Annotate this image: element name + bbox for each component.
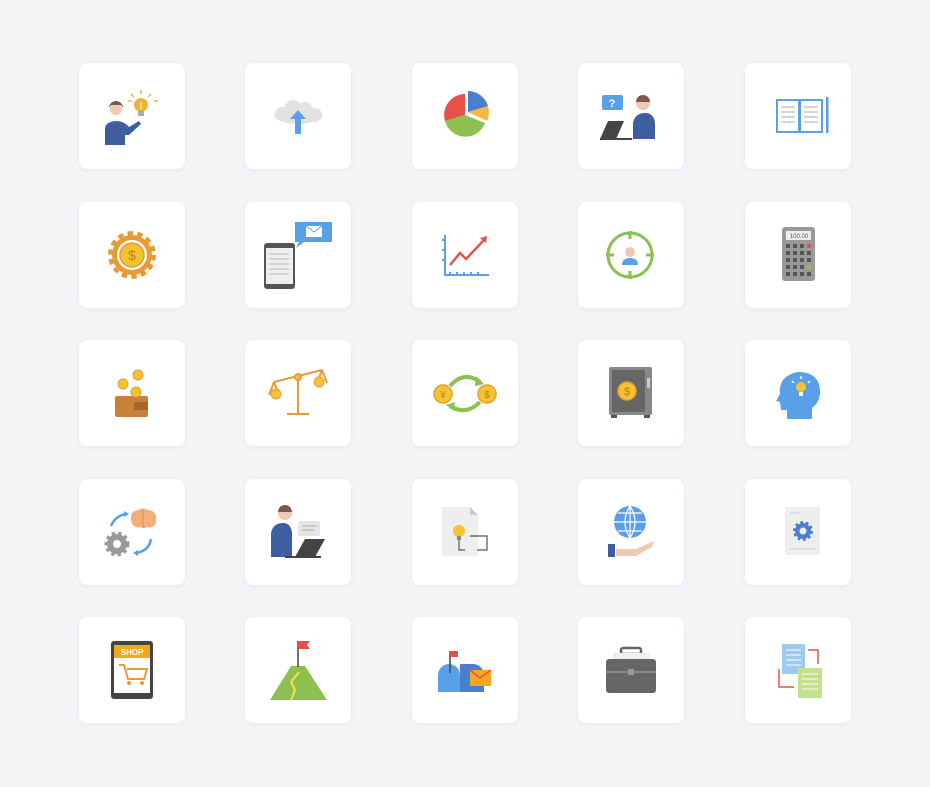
icon: person in circle target (606, 231, 654, 279)
card: laptop question (578, 63, 684, 169)
icon: briefcase with papers (606, 648, 656, 693)
icon: document with gear (785, 507, 820, 555)
card: briefcase (578, 617, 684, 723)
icon: globe on hand (608, 506, 654, 557)
card: balance scale (245, 340, 351, 446)
card: mountain flag (245, 617, 351, 723)
icon: tablet shop: SHOP (121, 648, 144, 657)
card: money gear (79, 202, 185, 308)
card: shop tablet (79, 617, 185, 723)
card: calculator (745, 202, 851, 308)
card: person laptop chat (245, 479, 351, 585)
icon: yen dollar exchange (434, 376, 496, 411)
card: pie chart (412, 63, 518, 169)
icon: document transfer (779, 644, 822, 698)
icon: balance scale (269, 370, 327, 414)
card: gear brain (79, 479, 185, 585)
card: idea person (79, 63, 185, 169)
card: head idea (745, 340, 851, 446)
icon: person at laptop with question: ? (609, 98, 616, 110)
card: idea document (412, 479, 518, 585)
icon: calculator: 100.00 (790, 234, 809, 240)
card: safe (578, 340, 684, 446)
icon: person with lightbulb: ! (140, 101, 142, 111)
icon: yen dollar exchange: ¥ (439, 390, 446, 401)
card: cloud upload (245, 63, 351, 169)
icon: gear and brain cycle (107, 508, 156, 556)
icon: pie chart (444, 91, 489, 137)
card: mailbox (412, 617, 518, 723)
icon: gear with dollar: $ (128, 247, 136, 263)
card: target person (578, 202, 684, 308)
icon: document with bulb (442, 507, 487, 556)
icon: line chart rising (442, 235, 489, 276)
card: documents flow (745, 617, 851, 723)
card: globe hand (578, 479, 684, 585)
icon: yen dollar exchange: $ (484, 390, 490, 401)
card: growth chart (412, 202, 518, 308)
icon: person at laptop with chat bubble (271, 505, 325, 558)
card: settings document (745, 479, 851, 585)
icon: mountain with flag (270, 641, 327, 700)
icon: mailbox with letter (438, 651, 491, 692)
card: currency exchange (412, 340, 518, 446)
icon: head with lightbulb (776, 372, 820, 419)
card: book (745, 63, 851, 169)
icon: open book (776, 97, 828, 133)
card: phone message (245, 202, 351, 308)
card: wallet coins (79, 340, 185, 446)
icon: safe with coin: $ (624, 386, 630, 398)
icon: wallet with coins (115, 370, 148, 417)
icon: phone with mail bubble (264, 222, 332, 289)
icon: cloud upload (274, 100, 322, 134)
